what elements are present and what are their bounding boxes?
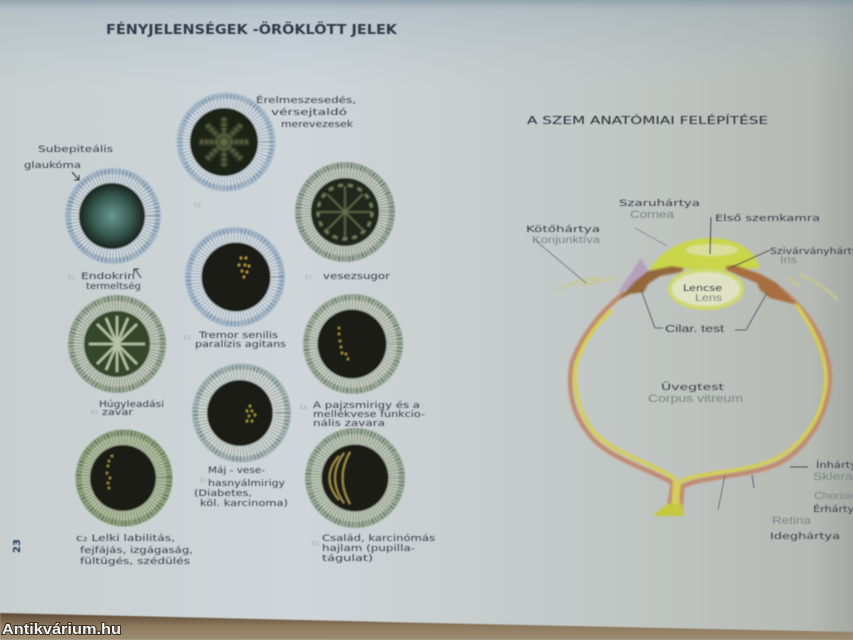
label: Szaruhártya / Cornea xyxy=(619,199,700,246)
label: thyroid and adrenal xyxy=(300,400,425,429)
label: family carcinoma: c₂ xyxy=(312,539,319,547)
label: liver and pancreas: hasnyálmirigy xyxy=(208,479,286,489)
label: kidney xyxy=(305,272,390,282)
label: thyroid and adrenal: c₆ xyxy=(300,403,307,411)
label: Lencse / Lens: Lencse xyxy=(683,284,723,294)
label: Első szemkamra xyxy=(710,214,820,254)
bottom table edge xyxy=(0,613,853,640)
label: endocrine: termeltség xyxy=(86,281,141,292)
label: arteriosclerosis: merevezesek xyxy=(281,120,354,130)
label: liver and pancreas: köl. karcinoma) xyxy=(200,499,288,509)
iris: tremor senilis xyxy=(185,227,285,327)
label: subepithelial glaucoma: glaukóma xyxy=(24,160,81,171)
label: Choroid / Érhártya xyxy=(752,475,853,515)
iris: kidney xyxy=(295,162,395,262)
eye: cornea and anterior chamber xyxy=(649,238,760,270)
eye anatomy diagram xyxy=(557,238,838,516)
label: urination disorder: Húgyleadási xyxy=(99,400,164,410)
label: tremor senilis xyxy=(184,331,286,350)
label: tremor senilis: paralízis agitans xyxy=(195,340,286,350)
label: endocrine: Endokrin xyxy=(81,272,135,282)
label: Kötőhártya / Konjunktíva: Kötőhártya xyxy=(526,225,600,235)
label: Első szemkamra: Első szemkamra xyxy=(715,214,820,224)
iris: subepithelial glaucoma xyxy=(65,168,161,264)
label: Üvegtest / Corpus vitreum: Üvegtest xyxy=(661,382,725,393)
eye: lens xyxy=(670,270,742,308)
label: arteriosclerosis: Érelmeszesedés, xyxy=(256,94,356,106)
label: subepithelial glaucoma: Subepiteális xyxy=(38,145,113,155)
label: kidney: c₁ xyxy=(305,273,312,281)
label: thyroid and adrenal: nális zavara xyxy=(313,419,385,429)
label: liver and pancreas: Máj - vese- xyxy=(208,466,265,476)
iris: liver and pancreas xyxy=(192,364,291,462)
label: Cilar. test xyxy=(641,290,767,335)
label: emotional lability: fejfájás, izgágaság, xyxy=(80,546,193,556)
heading: right page title: A SZEM ANATÓMIAI FELÉPÍTÉSE xyxy=(527,114,768,127)
label: urination disorder: c₁ xyxy=(91,408,98,416)
eye: anterior chamber light centre xyxy=(686,244,738,256)
label: Ínhártya / Sklera: Sklera xyxy=(813,471,853,483)
label: Retina / Ideghártya: Ideghártya xyxy=(770,532,840,542)
iris: family carcinoma xyxy=(305,428,405,528)
label: emotional lability: fültügés, szédülés xyxy=(80,556,190,567)
eye: optic nerve base xyxy=(652,504,684,516)
label: family carcinoma: tágulat) xyxy=(322,554,373,564)
label: family carcinoma: Család, karcinómás xyxy=(322,533,435,544)
label: emotional lability: c₂ Lelki labilitás, xyxy=(76,534,175,544)
label: c3 marker: c₃ xyxy=(194,201,201,209)
label: Szivárványhártya / Iris: Iris xyxy=(780,255,797,266)
iris: arteriosclerosis xyxy=(176,92,276,192)
label: urination disorder xyxy=(91,400,164,418)
left page labels xyxy=(12,94,435,567)
label: emotional lability xyxy=(76,534,193,567)
label: endocrine xyxy=(68,269,141,292)
iris: urination disorder xyxy=(68,295,166,393)
right page labels xyxy=(526,199,853,542)
label: thyroid and adrenal: A pajzsmirigy és a xyxy=(313,400,420,411)
heading: left page title: FÉNYJELENSÉGEK -ÖRÖKLÖTT JELEK xyxy=(106,22,398,38)
label: Ínhártya / Sklera: Ínhártya xyxy=(816,459,853,471)
iris: emotional lability xyxy=(76,430,172,526)
label: Szaruhártya / Cornea: Szaruhártya xyxy=(619,199,700,209)
eye: sclera outer wall xyxy=(570,285,830,510)
label: subepithelial glaucoma xyxy=(24,145,113,180)
label: liver and pancreas xyxy=(194,466,288,509)
label: thyroid and adrenal: mellékvese funkcio- xyxy=(313,409,425,420)
eye: conjunctiva purple patch xyxy=(618,258,648,292)
label: Üvegtest / Corpus vitreum xyxy=(648,382,743,405)
iris: thyroid and adrenal xyxy=(303,294,403,394)
eye: choroid and retina inner wall xyxy=(575,303,826,510)
label: Cilar. test: Cilar. test xyxy=(665,324,724,335)
eye: right iris and ciliary xyxy=(726,265,798,305)
label: arteriosclerosis: vérsejtaldó xyxy=(271,107,348,118)
label: kidney: vesezsugor xyxy=(323,272,390,282)
label: Choroid / Érhártya: Érhártya xyxy=(813,503,853,515)
label: Szivárványhártya / Iris: Szivárványhártya xyxy=(770,247,853,257)
page number: 23 xyxy=(12,539,23,553)
label: Kötőhártya / Konjunktíva xyxy=(526,225,601,283)
label: arteriosclerosis xyxy=(256,94,356,130)
label: Szaruhártya / Cornea: Cornea xyxy=(630,209,675,221)
label: Szivárványhártya / Iris xyxy=(730,247,853,268)
watermark: Antikvárium.hu xyxy=(2,622,121,638)
label: endocrine: c₁ xyxy=(68,273,75,281)
label: Kötőhártya / Konjunktíva: Konjunktíva xyxy=(532,235,601,246)
label: Choroid / Érhártya: Chorioid xyxy=(814,491,853,502)
label: Lencse / Lens xyxy=(683,284,723,304)
label: Retina / Ideghártya: Retina xyxy=(772,515,812,527)
eye: conjunctiva fold right xyxy=(788,275,838,300)
label: Ínhártya / Sklera xyxy=(790,459,853,483)
label: tremor senilis: Tremor senilis xyxy=(198,331,278,341)
top shadow of the page xyxy=(0,0,853,90)
label: Retina / Ideghártya xyxy=(718,475,840,542)
label: liver and pancreas: (Diabetes, xyxy=(194,489,252,499)
label: family carcinoma xyxy=(312,533,435,564)
eye: conjunctiva fold left xyxy=(557,277,618,290)
label: Üvegtest / Corpus vitreum: Corpus vitreum xyxy=(648,393,743,405)
label: liver and pancreas: c₁ xyxy=(200,476,207,484)
label: tremor senilis: c₂ xyxy=(184,333,191,341)
label: family carcinoma: hajlam (pupilla- xyxy=(322,544,415,554)
label: Lencse / Lens: Lens xyxy=(695,293,722,304)
eye: left iris and ciliary xyxy=(618,266,684,300)
label: urination disorder: zavar xyxy=(102,408,133,418)
